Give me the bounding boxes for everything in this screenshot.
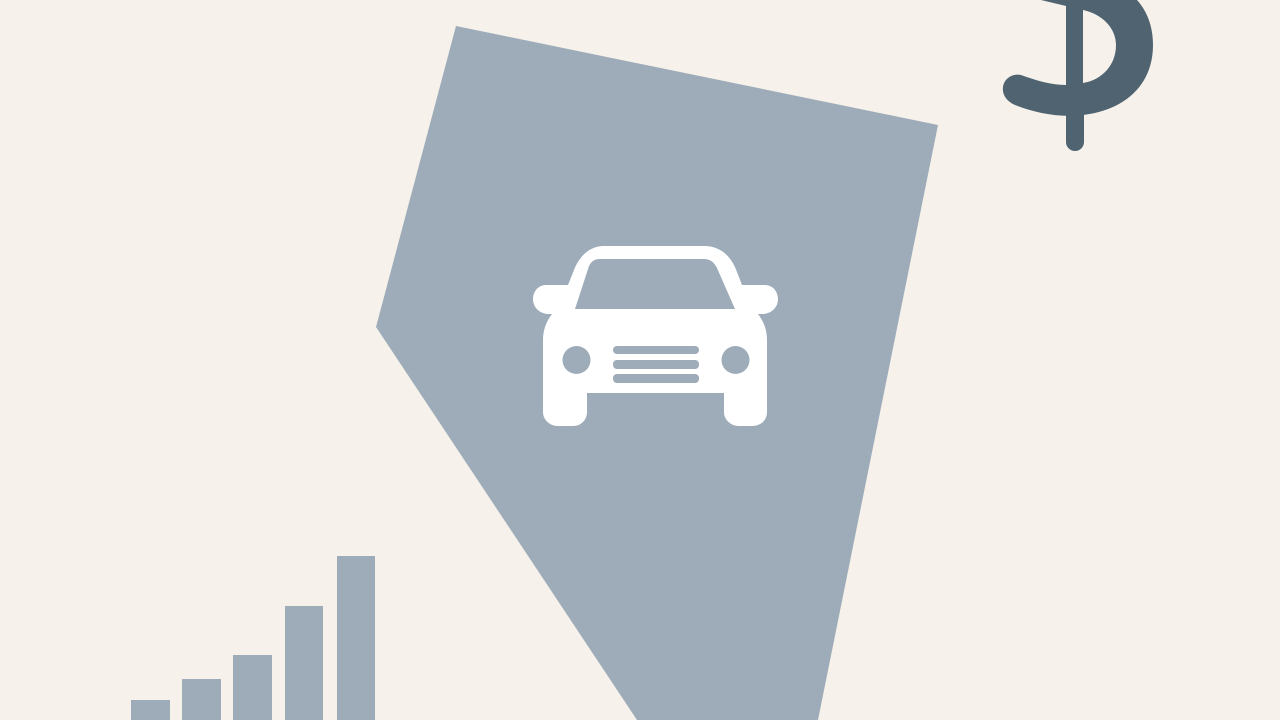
grille: [613, 346, 699, 383]
icon: cropped dollar sign: [1003, 0, 1153, 151]
icon: car: [533, 246, 778, 426]
left headlight: [562, 346, 590, 374]
dollar stem: [1066, 100, 1084, 151]
bar chart: [131, 556, 375, 720]
state map shape: [376, 26, 938, 720]
right headlight: [722, 346, 750, 374]
